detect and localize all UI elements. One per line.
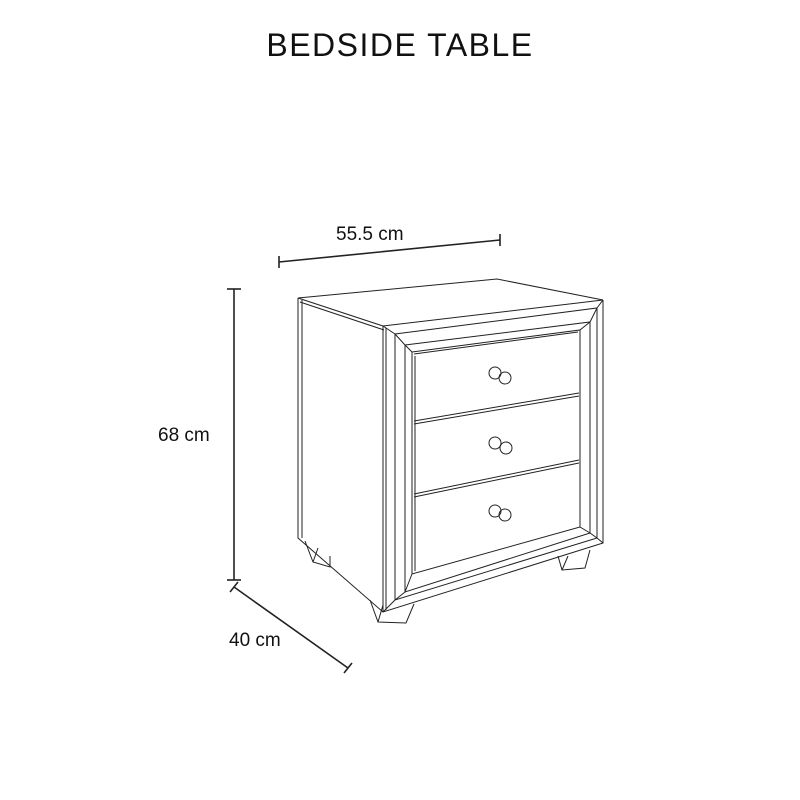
label: height: 68 cm (158, 425, 210, 446)
knobs (489, 367, 501, 379)
legs (305, 541, 330, 567)
title: BEDSIDE TABLE (266, 27, 534, 63)
dimension: depth line (230, 582, 352, 673)
dimension: height line (227, 289, 241, 580)
label: width: 55.5 cm (336, 224, 404, 245)
dimension: width line (279, 234, 500, 268)
bedside table (298, 279, 603, 623)
label: depth: 40 cm (229, 630, 281, 651)
